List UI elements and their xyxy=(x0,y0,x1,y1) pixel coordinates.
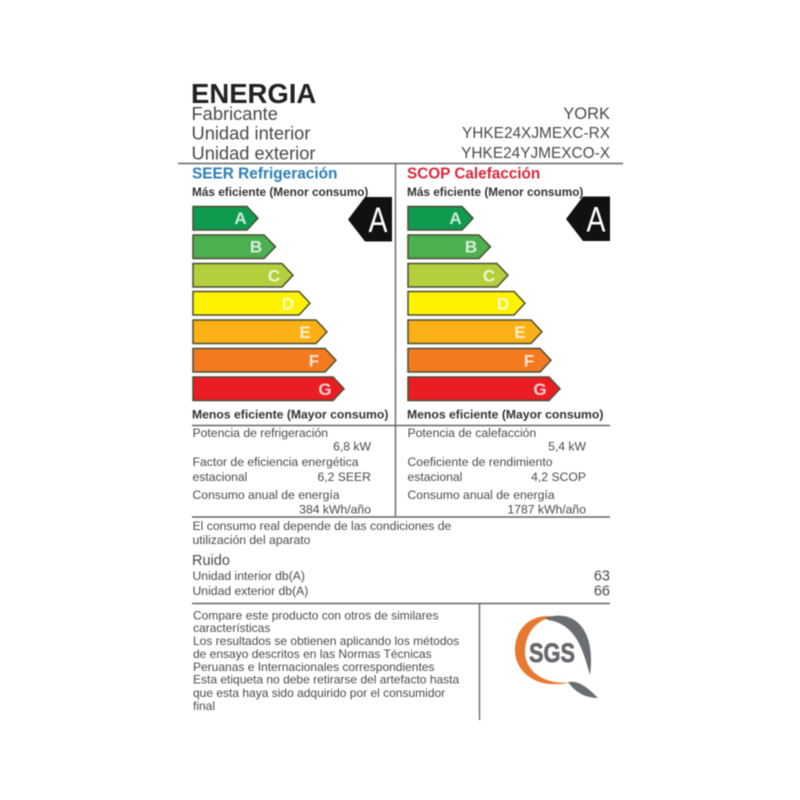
disclaimer text: características xyxy=(193,621,270,635)
energy scale A to G: G xyxy=(318,380,332,399)
product details xyxy=(192,103,610,164)
energy scale A to G: F xyxy=(524,352,534,370)
disclaimer text: Compare este producto con otros de similares xyxy=(193,608,438,622)
heating specifications: Consumo anual de energía xyxy=(408,488,555,502)
values: brand and models: YHKE24XJMEXC-RX xyxy=(462,125,610,142)
consumption note: El consumo real depende de las condiciones de xyxy=(192,519,452,533)
cooling specifications: 6,8 kW xyxy=(333,440,371,454)
rating badge: A: A xyxy=(368,201,388,240)
disclaimer text: final xyxy=(193,699,215,713)
energy scale A to G: B xyxy=(465,238,477,256)
labels: manufacturer and units xyxy=(192,103,315,164)
energy scale A to G: A xyxy=(234,209,247,228)
energy scale A to G: F xyxy=(309,352,319,370)
values: brand and models: YHKE24YJMEXCO-X xyxy=(461,145,610,162)
noise section xyxy=(192,553,610,600)
cooling specifications: Potencia de refrigeración xyxy=(192,426,328,440)
icon: SGS certification logo: SGS xyxy=(529,638,575,668)
heating specifications: 1787 kWh/año xyxy=(507,502,586,516)
energy scale A to G xyxy=(193,206,344,400)
heading: SCOP: SCOP Calefacción xyxy=(407,166,540,182)
heating specifications: 4,2 SCOP xyxy=(531,470,586,484)
noise labels: Unidad interior db(A) xyxy=(192,569,305,583)
labels: manufacturer and units: Unidad exterior xyxy=(192,142,315,164)
consumption note: utilización del aparato xyxy=(192,533,311,547)
energy scale A to G: D xyxy=(497,294,509,314)
disclaimer text: que esta haya sido adquirido por el consumidor xyxy=(193,686,445,700)
energy scale A to G: E xyxy=(514,323,526,342)
heating specifications: estacional xyxy=(408,470,462,484)
cooling specifications: 384 kWh/año xyxy=(299,502,371,516)
noise heading: Ruido xyxy=(192,553,230,569)
cooling specifications: estacional xyxy=(192,470,247,484)
energy scale A to G: G xyxy=(533,380,547,399)
heating specifications: Coeficiente de rendimiento xyxy=(408,455,553,469)
heating specifications xyxy=(408,426,586,516)
energy scale A to G: A xyxy=(449,209,462,228)
heating specifications: 5,4 kW xyxy=(548,440,586,454)
cooling specifications: Factor de eficiencia energética xyxy=(192,455,359,469)
scale top label: Más eficiente (Menor consumo) xyxy=(407,185,583,199)
cooling specifications: 6,2 SEER xyxy=(317,470,371,484)
panel: SCOP heating xyxy=(407,166,610,516)
scale top label: Más eficiente (Menor consumo) xyxy=(192,185,368,199)
noise labels xyxy=(192,569,308,598)
energy scale A to G: D xyxy=(282,294,294,314)
energy scale A to G xyxy=(408,206,560,400)
rating badge: A xyxy=(566,196,610,241)
heading: SEER: SEER Refrigeración xyxy=(192,166,337,182)
labels: manufacturer and units: Fabricante xyxy=(192,103,278,124)
noise values: 66 xyxy=(594,584,610,600)
icon: SGS certification logo xyxy=(515,616,598,698)
cooling specifications: Consumo anual de energía xyxy=(192,488,340,502)
disclaimer text: Los resultados se obtienen aplicando los métodos xyxy=(193,634,459,648)
energy scale A to G: C xyxy=(483,266,495,286)
values: brand and models: YORK xyxy=(563,105,610,123)
labels: manufacturer and units: Unidad interior xyxy=(192,122,310,144)
energy scale A to G: E xyxy=(299,323,311,342)
energy scale A to G: B xyxy=(250,238,262,256)
consumption note xyxy=(192,519,452,547)
values: brand and models xyxy=(461,105,610,162)
rating badge: A: A xyxy=(586,200,606,240)
noise values: 63 xyxy=(594,568,610,584)
scale bottom label: Menos eficiente (Mayor consumo) xyxy=(407,408,603,422)
scale bottom label: Menos eficiente (Mayor consumo) xyxy=(192,408,388,422)
cooling specifications xyxy=(192,426,371,516)
heating specifications: Potencia de calefacción xyxy=(408,426,536,440)
title: ENERGIA xyxy=(191,78,316,109)
disclaimer text: Esta etiqueta no debe retirarse del artefacto hasta xyxy=(193,672,459,686)
disclaimer text: Peruanas e Internacionales correspondientes xyxy=(193,660,434,674)
energy scale A to G: C xyxy=(268,266,280,286)
noise values xyxy=(594,568,610,600)
noise labels: Unidad exterior db(A) xyxy=(192,584,308,598)
disclaimer text xyxy=(193,608,459,713)
panel: SEER cooling xyxy=(192,166,392,516)
disclaimer text: de ensayo descritos en las Normas Técnicas xyxy=(193,647,432,661)
rating badge: A xyxy=(348,197,392,242)
